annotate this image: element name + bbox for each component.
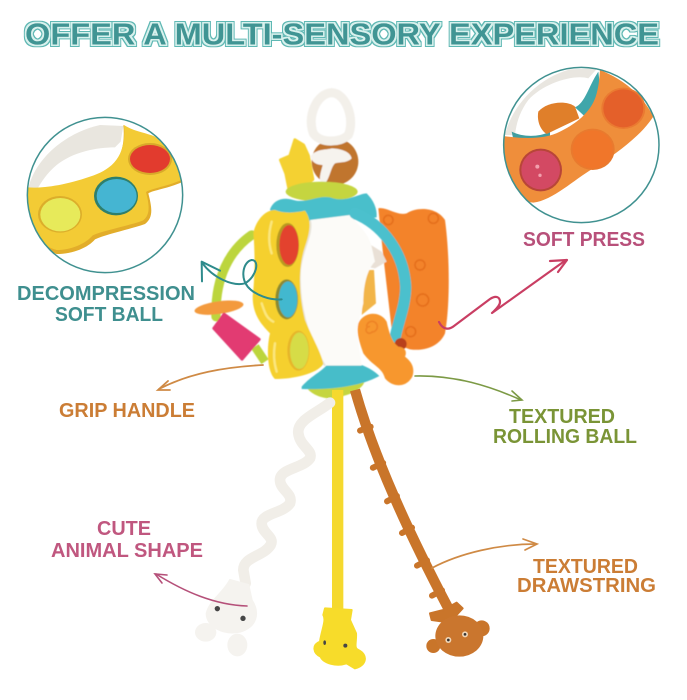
label: textured rolling ball: ROLLING BALL [493, 426, 637, 448]
label: textured drawstring [517, 556, 656, 597]
toy: orange panel nubs [384, 213, 438, 337]
arrow: to cute animal shape [155, 574, 247, 606]
title: OFFER A MULTI-SENSORY EXPERIENCE [25, 16, 659, 52]
arrow: to soft press [439, 260, 567, 329]
toy: orange press panel [378, 208, 449, 350]
toy: white loop base [311, 148, 352, 185]
toy: yellow side panel [253, 210, 323, 379]
toy: blue press ball [275, 279, 298, 319]
strings and animal charms [195, 390, 490, 668]
toy: orange disc [194, 298, 244, 317]
label: decompression soft ball [17, 283, 195, 326]
toy: grip beads [194, 298, 259, 359]
toy: white centre body [300, 215, 375, 366]
toy: orange strut [362, 270, 376, 315]
yellow string [332, 390, 343, 610]
toy: ring hole [395, 338, 407, 350]
toy: teal bottom band [302, 365, 379, 389]
label: cute animal shape: CUTE [97, 518, 151, 540]
string knots [356, 423, 446, 600]
label: soft press: SOFT PRESS [523, 229, 645, 251]
toy: brown animal head [312, 138, 358, 185]
toy: central activity ball [194, 93, 449, 398]
label: cute animal shape: ANIMAL SHAPE [51, 540, 203, 562]
white animal charm [195, 580, 256, 656]
white wavy string [243, 403, 330, 583]
brown textured string [355, 390, 448, 608]
arrow: to textured rolling ball [415, 376, 522, 401]
toy: body parts [253, 193, 449, 398]
toy: lime top cap [286, 182, 358, 202]
toy: lime press ball [287, 331, 309, 371]
toy: yellow star [281, 140, 313, 190]
label: textured drawstring: DRAWSTRING [517, 575, 656, 597]
label: decompression soft ball: DECOMPRESSION [17, 283, 195, 305]
arrow: to grip handle [158, 365, 263, 390]
toy: white teether loop [311, 93, 351, 141]
toy: red press ball [276, 223, 299, 267]
arrow: to textured drawstring [432, 539, 537, 568]
yellow animal charm [314, 608, 365, 668]
toy: lime bottom cap [305, 380, 365, 398]
toy: panel highlights [262, 222, 277, 372]
label: textured drawstring: TEXTURED [533, 556, 638, 578]
panel: soft press close-up [503, 67, 659, 223]
toy: pink block [214, 314, 259, 359]
brown monkey charm [426, 603, 490, 657]
toy: upper parts [216, 93, 358, 362]
toy: lime grip arc [216, 235, 252, 317]
toy: teal top band [270, 193, 377, 223]
label: grip handle: GRIP HANDLE [59, 400, 195, 422]
toy: orange butterfly teether [358, 314, 413, 385]
toy: teal ring arc [355, 213, 406, 340]
panel: decompression soft ball close-up [23, 117, 185, 273]
label: cute animal shape [51, 518, 203, 562]
toy: cream inner ring [365, 243, 387, 268]
label: decompression soft ball: SOFT BALL [55, 304, 163, 326]
arrow: to decompression soft ball [202, 260, 282, 300]
label: textured rolling ball [493, 406, 637, 448]
label: textured rolling ball: TEXTURED [509, 406, 615, 428]
